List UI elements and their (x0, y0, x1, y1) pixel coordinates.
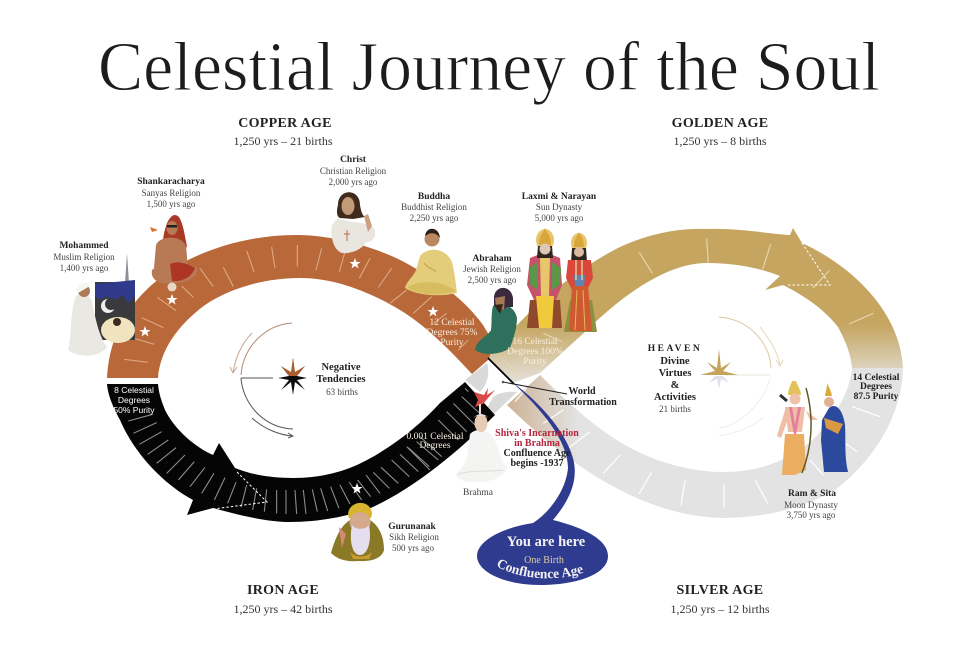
figure: Abraham: Abraham (472, 254, 512, 264)
copper age heading (234, 116, 333, 148)
heaven diagram (719, 317, 783, 436)
silver age band (507, 368, 903, 518)
world transformation label and pointer (488, 358, 617, 408)
figure: Laxmi and Narayan: Sun Dynasty (536, 202, 583, 212)
Ram and Sita label: Ram & Sita (788, 489, 836, 499)
negative tendencies text (316, 362, 366, 397)
gold degrees label (507, 337, 563, 367)
silver age heading: 1,250 yrs – 12 births (670, 602, 770, 616)
golden age heading (672, 116, 768, 148)
figure: Laxmi and Narayan: 5,000 yrs ago (535, 213, 584, 223)
figure: Christ: 2,000 yrs ago (329, 177, 378, 187)
figure: Shankaracharya: Sanyas Religion (142, 188, 201, 198)
figure: Christ (320, 155, 387, 253)
lowest degrees label (406, 432, 464, 451)
figure: Christ: Christ (340, 155, 367, 165)
iron age heading: IRON AGE (247, 583, 319, 598)
world transformation label and pointer: World (568, 386, 596, 397)
blue swoosh and speech bubble: One Birth (524, 555, 564, 566)
blue swoosh and speech bubble (477, 384, 608, 585)
title: Celestial Journey of the Soul (98, 29, 880, 106)
gold degrees label: Degrees 100% (507, 347, 563, 357)
figure: Shankaracharya: Shankaracharya (137, 177, 205, 187)
Shiva's incarnation label (495, 428, 579, 469)
figure: Buddha: Buddhist Religion (401, 202, 467, 212)
heaven text: Activities (654, 392, 696, 403)
figure: Ram and Sita (777, 381, 848, 475)
figure: Mohammed (53, 241, 135, 356)
heaven text: Virtues (659, 368, 691, 379)
silver age heading (670, 583, 770, 616)
Shiva's incarnation label: Confluence Age (504, 448, 571, 459)
Ram and Sita label (784, 489, 838, 520)
figure: Abraham: 2,500 yrs ago (468, 275, 517, 285)
figure: Shankaracharya: 1,500 yrs ago (147, 199, 196, 209)
golden age heading: GOLDEN AGE (672, 116, 768, 131)
lowest degrees label: 0.001 Celestial (406, 432, 464, 442)
silver age heading: SILVER AGE (677, 583, 763, 598)
Ram and Sita label: Moon Dynasty (784, 500, 838, 510)
figure: Gurunanak (331, 503, 439, 561)
negative tendencies text: Tendencies (316, 374, 366, 385)
heaven text (648, 344, 702, 414)
figure: Gurunanak: 500 yrs ago (392, 543, 434, 553)
blue swoosh and speech bubble: You are here (507, 534, 586, 550)
iron age band (107, 382, 495, 522)
figure: Gurunanak: Gurunanak (388, 522, 436, 532)
silver degrees label (853, 373, 900, 402)
figure: Abraham (463, 254, 521, 354)
gold degrees label: Purity (523, 357, 547, 367)
stars (140, 258, 438, 494)
heaven text: HEAVEN (648, 344, 702, 354)
figure: Mohammed: 1,400 yrs ago (60, 263, 109, 273)
Shiva's incarnation label: in Brahma (514, 438, 560, 449)
figure: Laxmi and Narayan (522, 192, 597, 332)
heaven text: Divine (660, 356, 690, 367)
crossing wedges (465, 363, 517, 415)
negative tendencies text: 63 births (326, 387, 358, 397)
copper degrees label: Purity (440, 338, 464, 348)
figure: Abraham: Jewish Religion (463, 264, 521, 274)
iron degrees label: 8 Celestial (114, 385, 154, 395)
silver degrees label: 87.5 Purity (854, 392, 899, 402)
iron degrees label: 50% Purity (113, 405, 155, 415)
heaven text: 21 births (659, 404, 691, 414)
silver degrees label: 14 Celestial (853, 373, 900, 383)
copper age heading: 1,250 yrs – 21 births (234, 134, 333, 148)
golden age band (488, 228, 903, 383)
golden age heading: 1,250 yrs – 8 births (674, 134, 767, 148)
star: negative (278, 358, 307, 395)
copper age heading: COPPER AGE (238, 116, 332, 131)
negative tendencies text: Negative (321, 362, 361, 373)
figure: Christ: Christian Religion (320, 166, 387, 176)
lowest degrees label: Degrees (419, 441, 451, 451)
figure: Buddha: 2,250 yrs ago (410, 213, 459, 223)
copper degrees label: Degrees 75% (427, 328, 478, 338)
copper age band (107, 235, 495, 378)
iron degrees label (113, 385, 155, 415)
figure: Brahma: Brahma (463, 488, 494, 498)
figure: Brahma (456, 388, 507, 498)
copper degrees label: 12 Celestial (429, 318, 475, 328)
Shiva's incarnation label: begins -1937 (510, 458, 564, 469)
Ram and Sita label: 3,750 yrs ago (787, 510, 836, 520)
blue swoosh and speech bubble: Confluence Age (498, 560, 584, 578)
iron degrees label: Degrees (118, 395, 150, 405)
copper degrees label (427, 318, 478, 348)
gold degrees label: 16 Celestial (512, 337, 558, 347)
figure: Buddha: Buddha (418, 192, 450, 202)
figure: Gurunanak: Sikh Religion (389, 532, 439, 542)
iron age heading: 1,250 yrs – 42 births (234, 602, 333, 616)
star: heaven (700, 349, 738, 389)
figure: Mohammed: Muslim Religion (53, 252, 115, 262)
silver degrees label: Degrees (860, 382, 892, 392)
figure: Shankaracharya (137, 177, 205, 292)
heaven text: & (671, 380, 680, 391)
Shiva's incarnation label: Shiva's Incarnation (495, 428, 579, 439)
figure: Buddha (401, 192, 467, 295)
iron age heading (234, 583, 333, 616)
negative tendencies diagram (230, 323, 293, 438)
figure: Mohammed: Mohammed (59, 241, 109, 251)
world transformation label and pointer: Transformation (549, 397, 617, 408)
figure: Laxmi and Narayan: Laxmi & Narayan (522, 192, 597, 202)
